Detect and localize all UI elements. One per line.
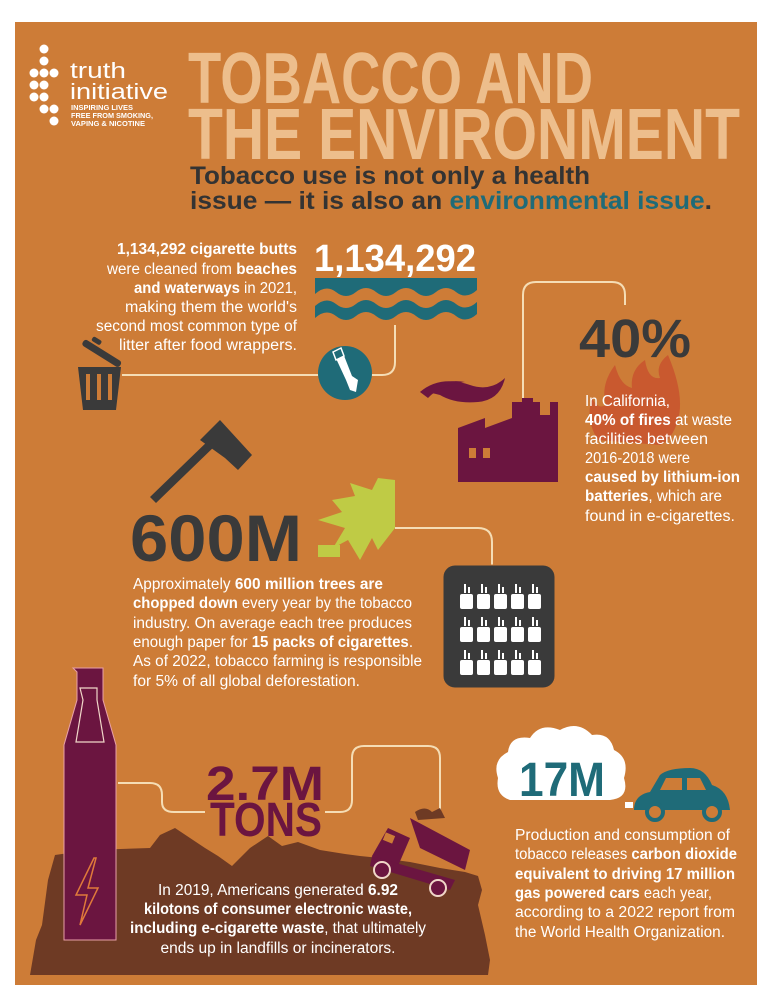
text block: e-waste: kilotons of consumer electronic waste, (144, 901, 412, 918)
icon: axe (150, 420, 252, 503)
text block: trees: enough paper for 15 packs of cigarettes. (133, 634, 413, 651)
icon: cloud (496, 726, 626, 800)
stat: 2.7M TONS (206, 758, 324, 847)
text block: fires: caused by lithium-ion (585, 469, 740, 486)
text block: trees: As of 2022, tobacco farming is responsible (133, 653, 422, 670)
stat: 600M: 600M (130, 501, 302, 575)
logo: FREE FROM SMOKING, (71, 113, 153, 120)
icon: trash can (78, 336, 122, 410)
stat: 17M: 17M (519, 754, 605, 807)
stat: 2.7M TONS: 2.7M (206, 758, 324, 811)
icon: cigarette butt circle (318, 346, 372, 400)
text block: carbon dioxide: Production and consumption of (515, 827, 731, 844)
text block: fires: batteries, which are (585, 488, 722, 505)
text block: cigarette butts: second most common type of (96, 318, 298, 335)
subtitle: Tobacco use is not only a health (190, 162, 590, 190)
text block: carbon dioxide: tobacco releases carbon dioxide (515, 846, 737, 863)
text block: fires: In California, (585, 393, 670, 410)
title: TOBACCO AND (188, 39, 593, 119)
text block: fires: found in e-cigarettes. (585, 508, 735, 525)
icon: dump truck (370, 808, 470, 896)
text block: carbon dioxide: the World Health Organization. (515, 924, 725, 941)
subtitle (190, 162, 712, 215)
text block: e-waste: including e-cigarette waste, that ultimately (130, 920, 426, 937)
text block: e-waste (130, 882, 426, 957)
icon: factory with smoke (420, 378, 558, 482)
icon: cigarette packs box (443, 565, 555, 688)
text block: trees: Approximately 600 million trees are (133, 576, 383, 593)
stat: 2.7M TONS: TONS (210, 794, 322, 847)
text block: carbon dioxide: gas powered cars each year, (515, 885, 712, 902)
text block: cigarette butts: and waterways in 2021, (134, 280, 297, 297)
icon: car (625, 768, 730, 820)
connectors (118, 282, 625, 815)
text block: fires: facilities between (585, 431, 708, 448)
text block: fires: 40% of fires at waste (585, 412, 732, 429)
text block: trees: chopped down every year by the tobacco (133, 595, 412, 612)
logo: INSPIRING LIVES (71, 105, 133, 112)
logo: initiative (70, 79, 168, 104)
text block: trees: for 5% of all global deforestation. (133, 673, 360, 690)
text block: cigarette butts: were cleaned from beaches (106, 261, 297, 278)
big number 1,134,292: 1,134,292 (314, 238, 476, 280)
icon: vape device (64, 668, 116, 940)
logo (30, 44, 168, 128)
logo: truth (70, 58, 126, 83)
stat: 40%: 40% (579, 309, 691, 369)
text block: carbon dioxide: according to a 2022 report from (515, 904, 735, 921)
text block: cigarette butts: making them the world's (125, 299, 297, 316)
icon: flame (590, 355, 680, 445)
text block: e-waste: ends up in landfills or incinerators. (160, 940, 396, 957)
text block: carbon dioxide: equivalent to driving 17 million (515, 866, 735, 883)
subtitle: issue — it is also an environmental issue . (190, 187, 712, 215)
logo: VAPING & NICOTINE (71, 121, 145, 128)
text block: trees (133, 576, 422, 690)
text block: cigarette butts: litter after food wrappers. (119, 337, 297, 354)
icon: waves (315, 278, 477, 320)
text block: cigarette butts (96, 241, 298, 354)
title (188, 39, 740, 175)
text block: e-waste: In 2019, Americans generated 6.92 (158, 882, 398, 899)
text block: trees: industry. On average each tree produces (133, 615, 412, 632)
text block: fires (585, 393, 740, 525)
text block: cigarette butts: 1,134,292 cigarette butts (117, 241, 297, 258)
text block: fires: 2016-2018 were (585, 450, 690, 467)
text block: carbon dioxide (515, 827, 737, 941)
icon: falling tree (318, 478, 395, 560)
landfill mound (30, 828, 490, 975)
